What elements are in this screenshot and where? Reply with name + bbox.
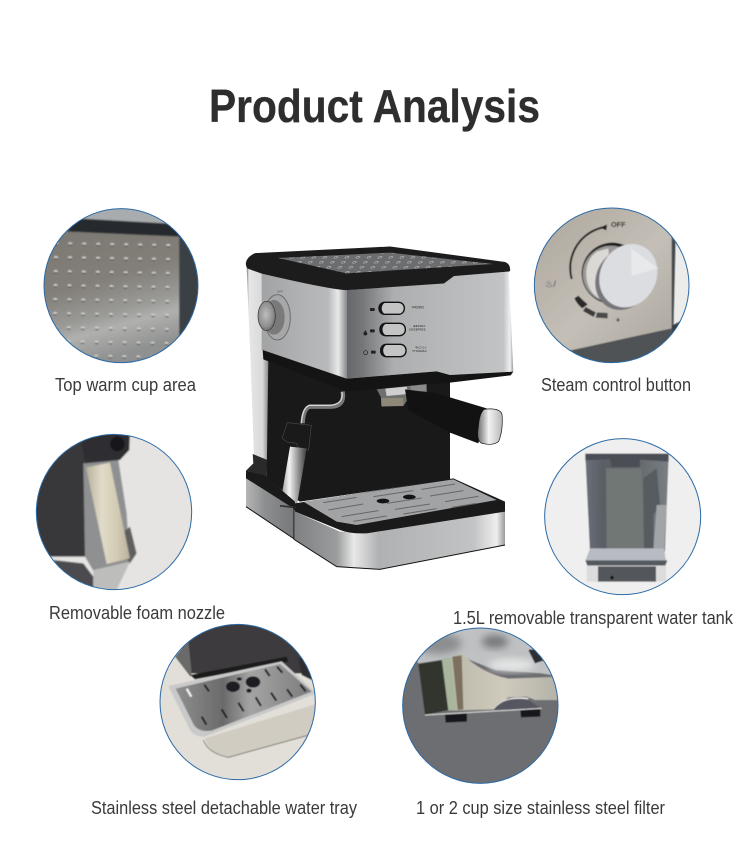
tank bottom	[246, 454, 267, 477]
drip tray rim	[295, 478, 505, 533]
blue ring	[545, 439, 701, 595]
black lid	[247, 248, 509, 289]
steam dial	[258, 290, 290, 340]
coffee machine illustration	[246, 248, 513, 569]
perforated cup warmer top	[278, 253, 493, 273]
power button	[370, 302, 424, 314]
handle end cap	[478, 409, 502, 444]
photo: steam knob: OFF	[611, 220, 626, 229]
panel: cup size filter	[402, 627, 565, 790]
infographic page	[36, 88, 733, 818]
photo: perforated plate	[44, 209, 198, 362]
photo: steam knob	[534, 208, 688, 362]
steam pipe	[301, 392, 343, 423]
label: stainless steel water tray: Stainless steel detachable water tray	[91, 798, 357, 818]
portafilter group head	[377, 384, 427, 407]
power button: ON/OFF	[411, 305, 424, 309]
photo: foam nozzle	[33, 432, 197, 595]
panel: top warm cup area	[44, 208, 198, 364]
front steel panel	[347, 271, 513, 379]
panel: removable water tank	[543, 437, 703, 600]
transparent water tank	[247, 267, 269, 470]
label: cup size filter: 1 or 2 cup size stainless steel filter	[416, 798, 665, 818]
pipe collar	[282, 423, 311, 450]
steam button	[364, 344, 427, 357]
coffee button: ESPRESSO	[408, 328, 425, 332]
steam wand	[280, 447, 307, 507]
blue ring	[160, 624, 315, 780]
steam wand tip	[280, 505, 297, 508]
blue ring	[44, 209, 198, 363]
steam dial: OFF	[277, 290, 283, 294]
side steel panel	[262, 273, 347, 379]
drip tray grille	[303, 479, 497, 525]
steam button: 1-2 CUP	[415, 345, 427, 349]
coffee button: COFFEE	[413, 324, 425, 328]
title: Product Analysis	[209, 80, 540, 132]
label: top warm cup area: Top warm cup area	[55, 375, 197, 395]
photo: steam knob: +	[616, 315, 621, 324]
underside black band	[263, 350, 513, 391]
blue ring	[534, 208, 689, 363]
base left black rim	[246, 471, 295, 510]
label: removable foam nozzle: Removable foam nozzle	[49, 603, 225, 623]
panel: removable foam nozzle	[33, 432, 197, 595]
steam button: CAPACITY	[412, 349, 427, 353]
base bottom edge	[246, 507, 505, 569]
panel: steam control button	[532, 205, 695, 368]
base front steel	[295, 503, 505, 569]
blue ring	[36, 434, 192, 590]
panel: stainless steel water tray	[158, 622, 318, 785]
photo: filter	[403, 628, 558, 783]
photo: steam knob: ♨/	[545, 279, 556, 289]
photo: water tank	[543, 437, 703, 600]
label: steam control button: Steam control button	[541, 375, 691, 395]
photo: drip tray	[158, 622, 318, 785]
base divider	[292, 507, 296, 539]
portafilter handle	[405, 389, 487, 443]
base left steel	[246, 478, 293, 538]
coffee button	[363, 323, 425, 336]
black machine column	[267, 359, 450, 502]
blue ring	[403, 628, 558, 783]
